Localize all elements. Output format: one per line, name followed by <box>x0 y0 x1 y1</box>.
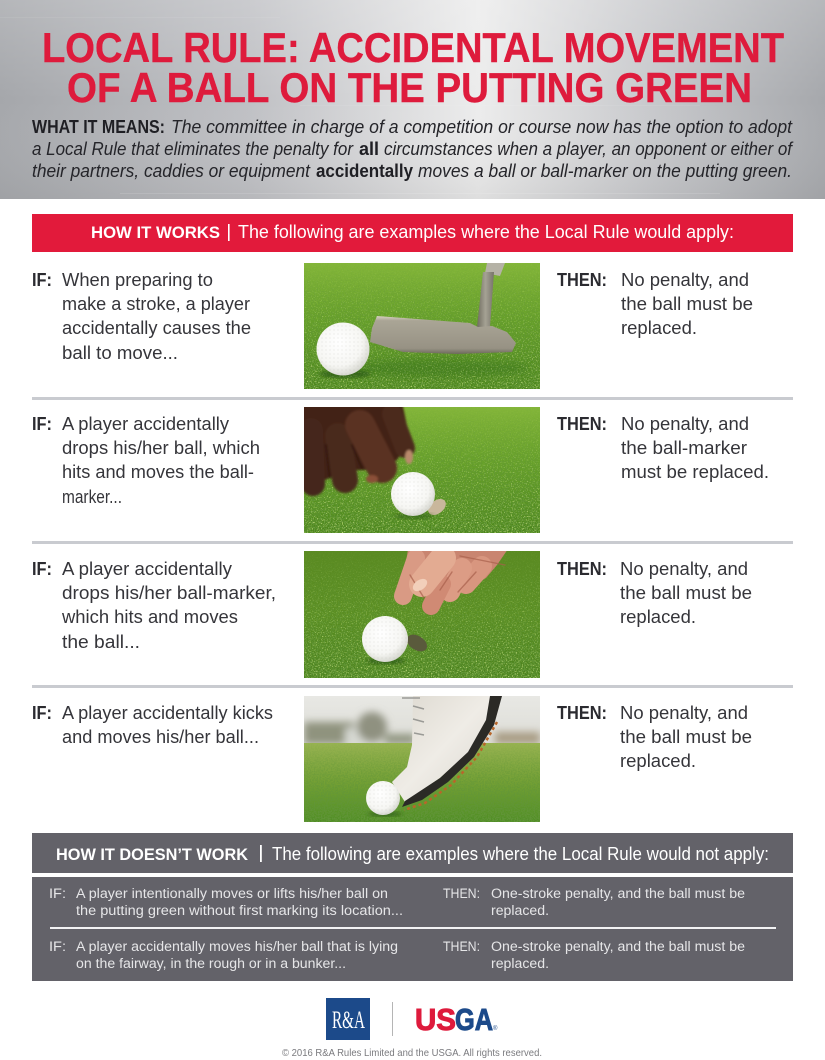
row 1: if text: ball to move... <box>62 343 178 363</box>
example 1 <box>49 886 745 918</box>
row 3: if text: which hits and moves <box>61 607 238 627</box>
row 4: then text <box>557 703 752 771</box>
example 1: One-stroke penalty, and the ball must be <box>491 886 745 901</box>
text block: what it means: all <box>359 139 379 159</box>
banner: how it doesn't work: HOW IT DOESN’T WORK <box>56 845 249 864</box>
row 4: if text <box>32 703 273 747</box>
example 2: on the fairway, in the rough or in a bunker... <box>76 956 346 971</box>
row 1: then text: the ball must be <box>621 294 753 314</box>
logo: USGA: GA <box>455 1002 493 1037</box>
text block: what it means: circumstances when a player, an opponent or either of <box>384 139 794 159</box>
row 2: then text: THEN: <box>557 414 607 434</box>
row 2: then text <box>557 414 769 482</box>
row 1: then text: replaced. <box>621 318 697 338</box>
row 3 photo: light hand dropping a ball-marker on a ball <box>304 549 540 678</box>
row 2: if text: A player accidentally <box>62 414 229 434</box>
text block: what it means: moves a ball or ball-marker on the putting green. <box>418 161 792 181</box>
row 3: then text <box>557 559 752 627</box>
title: OF A BALL ON THE PUTTING GREEN <box>67 64 752 111</box>
row 2: if text: IF: <box>32 414 52 434</box>
row 2: then text: No penalty, and <box>621 414 749 434</box>
row 1 photo: putter behind a ball <box>304 263 540 389</box>
example 2: THEN: <box>443 939 480 954</box>
text block: what it means: their partners, caddies or equipment <box>32 161 311 181</box>
row 3: if text: IF: <box>32 559 52 579</box>
row 3: then text: the ball must be <box>620 583 752 603</box>
logo: USGA: ® <box>493 1025 498 1032</box>
row 2: if text: hits and moves the ball- <box>62 462 254 482</box>
row 3: then text: THEN: <box>557 559 607 579</box>
row 3: then text: No penalty, and <box>620 559 748 579</box>
example 2: One-stroke penalty, and the ball must be <box>491 939 745 954</box>
header panel: brushed metal background <box>0 0 825 199</box>
logo: R&amp;A <box>326 998 370 1040</box>
row 3: then text: replaced. <box>620 607 696 627</box>
row 2 photo: dark hand dropping a ball on a ball-marker <box>300 402 540 533</box>
row 4: if text: and moves his/her ball... <box>62 727 259 747</box>
example 1: replaced. <box>491 903 549 918</box>
row 2: then text: the ball-marker <box>621 438 747 458</box>
example 1: the putting green without first marking its location... <box>76 903 403 918</box>
row 4: then text: the ball must be <box>620 727 752 747</box>
logo: USGA: US <box>415 1002 456 1037</box>
row 1: then text: No penalty, and <box>621 270 749 290</box>
text block: what it means <box>32 117 794 181</box>
text block: what it means: The committee in charge of a competition or course now has the option to adopt <box>171 117 793 137</box>
row 3: if text <box>32 559 276 652</box>
example 2: replaced. <box>491 956 549 971</box>
row 4: if text: A player accidentally kicks <box>62 703 273 723</box>
text block: what it means: WHAT IT MEANS: <box>32 117 165 137</box>
row 1: if text: When preparing to <box>62 270 213 290</box>
copyright: © 2016 R&A Rules Limited and the USGA. All rights reserved. <box>282 1047 542 1059</box>
row 1: if text: make a stroke, a player <box>62 294 250 314</box>
example 1: IF: <box>49 886 66 901</box>
banner: how it works: HOW IT WORKS <box>91 223 220 242</box>
row 1: if text: IF: <box>32 270 52 290</box>
row 3: if text: the ball... <box>62 632 140 652</box>
row 4: then text: No penalty, and <box>620 703 748 723</box>
row 3: if text: drops his/her ball-marker, <box>62 583 276 603</box>
row 4: then text: THEN: <box>557 703 607 723</box>
row 2: if text <box>32 414 260 507</box>
text block: what it means: a Local Rule that eliminates the penalty for <box>32 139 354 159</box>
row 2: then text: must be replaced. <box>621 462 769 482</box>
row 3: if text: A player accidentally <box>62 559 232 579</box>
logo: USGA <box>415 1002 498 1037</box>
example 2: IF: <box>49 939 66 954</box>
example 1: A player intentionally moves or lifts his/her ball on <box>76 886 388 901</box>
row 1: if text <box>32 270 251 363</box>
logo: R&amp;A: R&A <box>332 1007 365 1034</box>
panel: how it doesn't work examples <box>32 877 793 981</box>
row 1: then text: THEN: <box>557 270 607 290</box>
example 2 <box>49 939 745 971</box>
banner: how it works: The following are examples where the Local Rule would apply: <box>238 222 734 242</box>
title <box>42 24 784 111</box>
row 4 photo: golf shoe kicking a ball <box>304 696 540 822</box>
banner: how it doesn't work <box>32 833 793 873</box>
text block: what it means: accidentally <box>316 161 413 181</box>
banner: how it works <box>32 214 793 252</box>
row 1: if text: accidentally causes the <box>62 318 251 338</box>
row 2: if text: drops his/her ball, which <box>62 438 260 458</box>
example 1: THEN: <box>443 886 480 901</box>
example 2: A player accidentally moves his/her ball that is lying <box>76 939 398 954</box>
row 2: if text: marker... <box>62 487 122 507</box>
row 4: then text: replaced. <box>620 751 696 771</box>
banner: how it doesn't work: The following are examples where the Local Rule would not apply: <box>272 844 769 864</box>
row 1: then text <box>557 270 753 338</box>
row 4: if text: IF: <box>32 703 52 723</box>
